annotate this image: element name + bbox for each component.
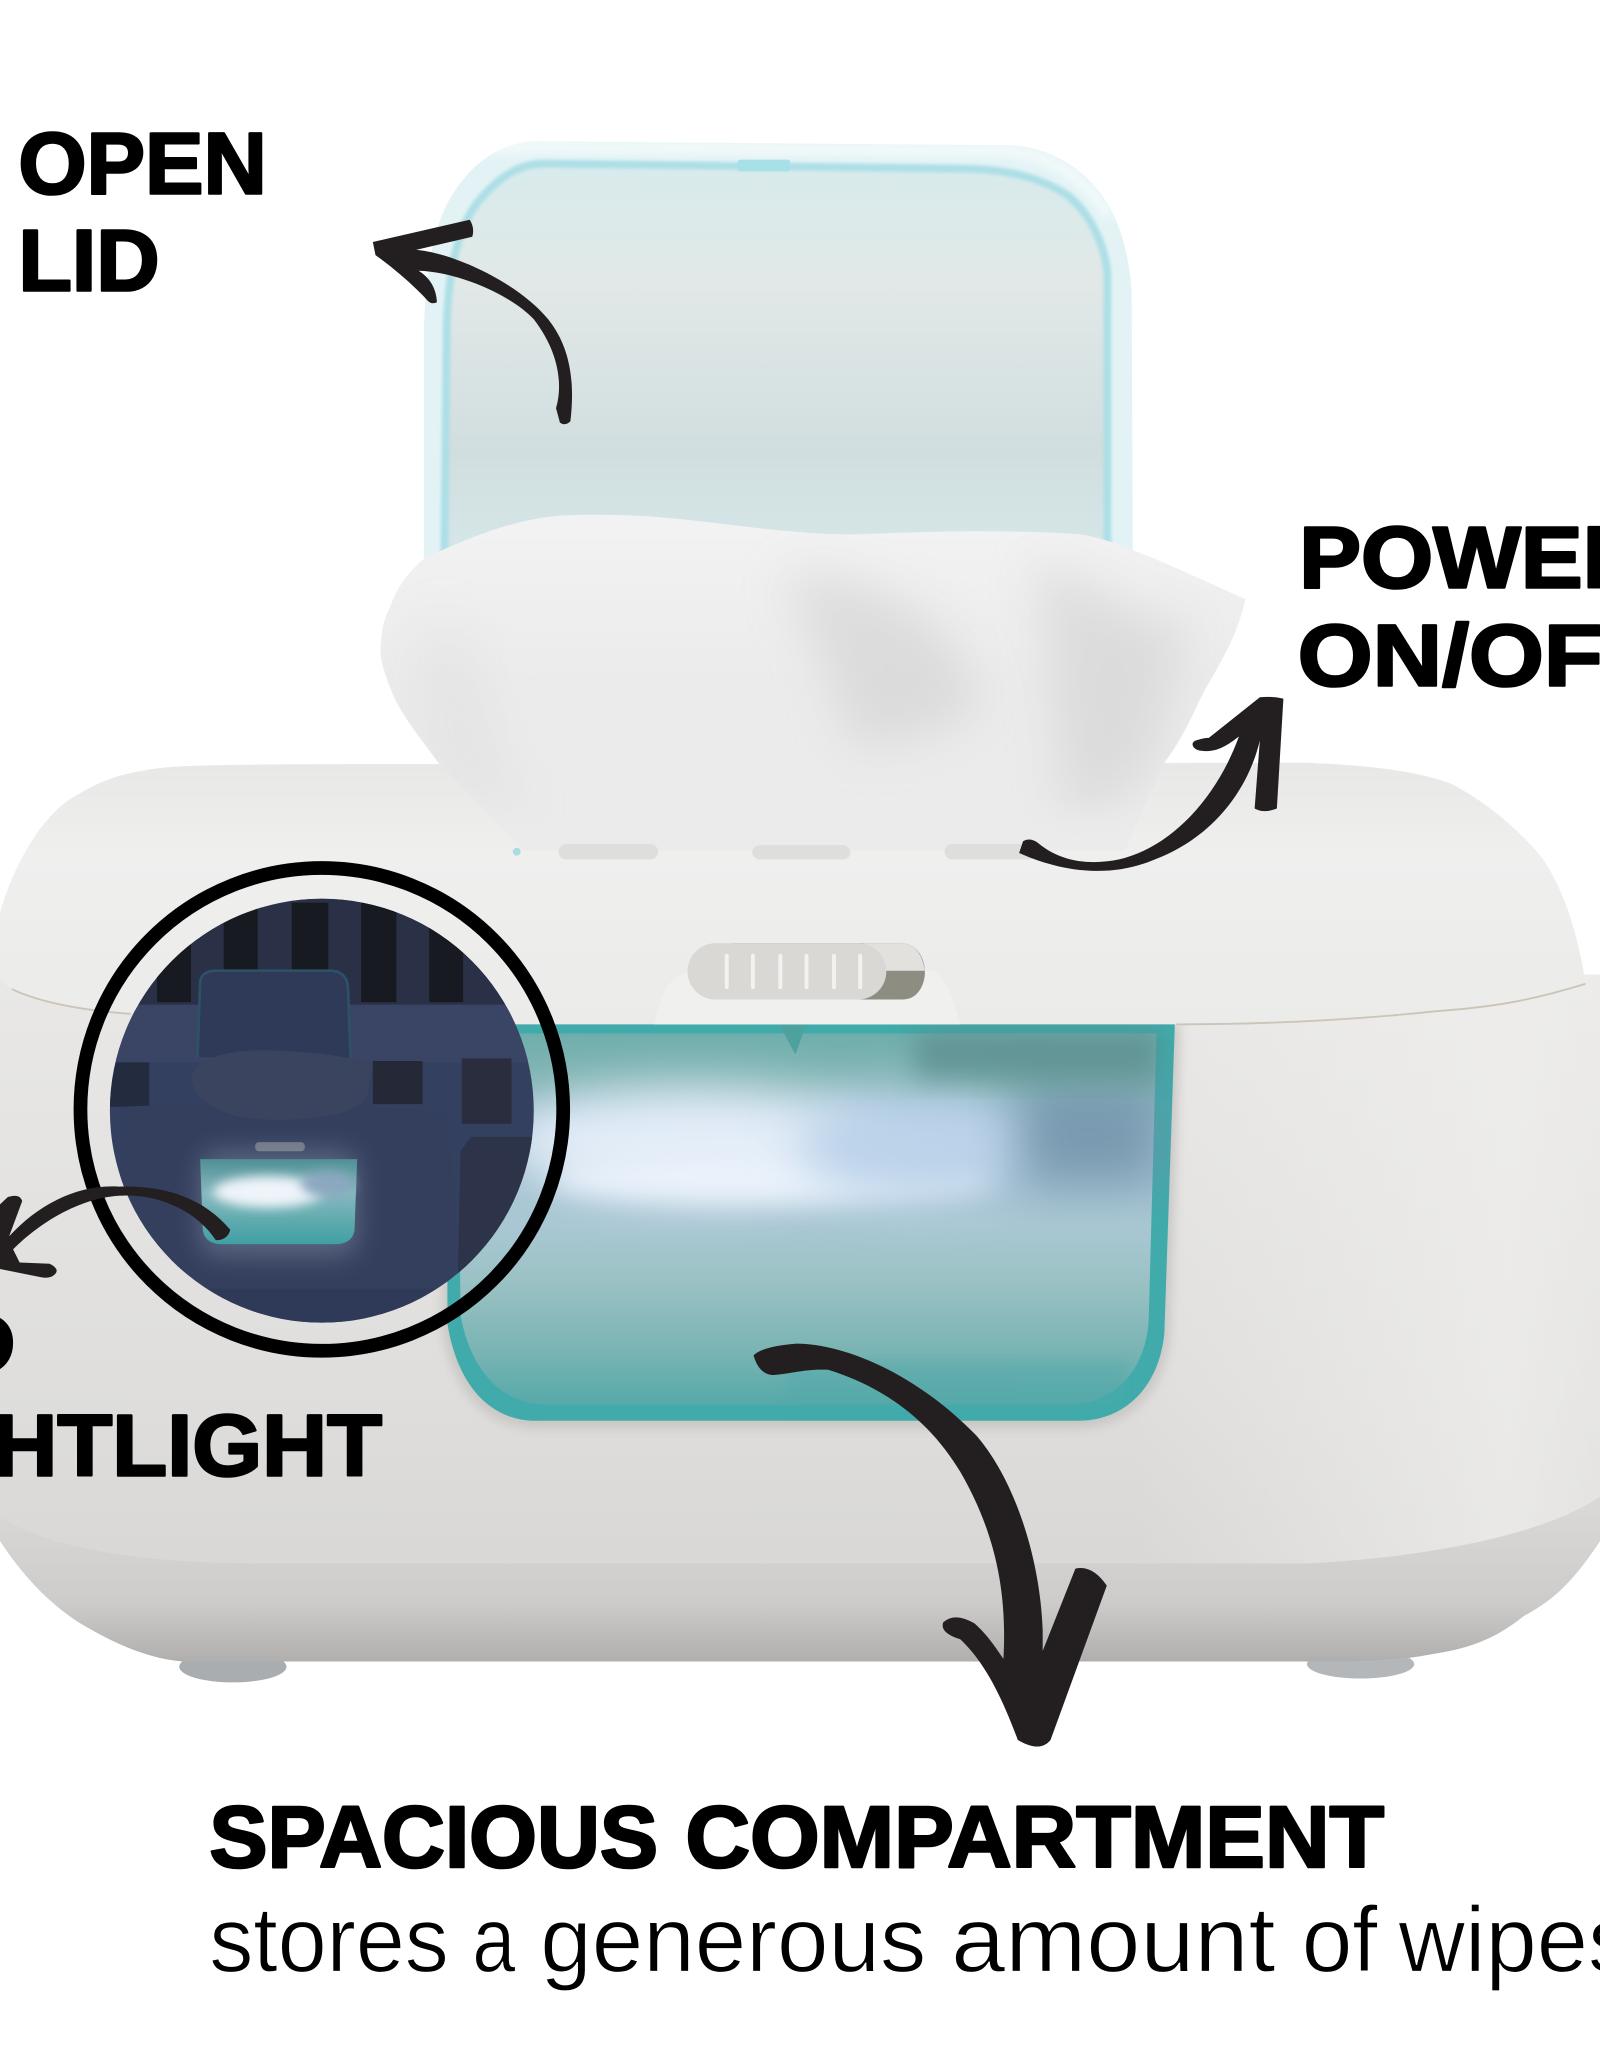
arrow: nightlight: [0, 1186, 230, 1278]
description text: [209, 1888, 1600, 1992]
description text: of: [1302, 1888, 1378, 1992]
label: power on/off: [1298, 508, 1600, 705]
lower body: [0, 975, 1600, 1661]
inset pillow: [458, 1137, 536, 1276]
description text: amount: [951, 1888, 1276, 1992]
arrow: spacious compartment: [754, 1344, 1107, 1747]
window shadow: [442, 1024, 1180, 1429]
top lid of body: [0, 763, 1586, 1024]
inset photo: [110, 898, 534, 1323]
lid seams: [12, 984, 1586, 1024]
window glow: [497, 1088, 890, 1193]
label: spacious compartment: [209, 1788, 1384, 1886]
right dim area: [1020, 1086, 1159, 1184]
arrow: power on/off: [1019, 697, 1283, 871]
label: spacious compartment: COMPARTMENT: [686, 1788, 1384, 1886]
label: open lid: OPEN: [18, 115, 267, 213]
product: wipes warmer: [0, 141, 1600, 1682]
viewing window: [447, 1024, 1175, 1421]
base rim: [0, 1491, 1600, 1661]
label: open lid: LID: [18, 211, 160, 309]
nightlight inset circle: [80, 868, 563, 1351]
open lid: [424, 141, 1133, 576]
label: spacious compartment: SPACIOUS: [209, 1788, 658, 1886]
description text: generous: [540, 1888, 926, 1992]
slider latch: [687, 943, 925, 1000]
rubber feet: [179, 1650, 1414, 1682]
description text: stores: [209, 1888, 449, 1992]
description text: a: [472, 1888, 516, 1992]
control buttons: [513, 844, 1036, 860]
label: open lid: [18, 115, 267, 309]
wipe fold shadows: [797, 576, 969, 741]
latch tray: [654, 971, 960, 1024]
wet wipe: [380, 514, 1246, 806]
mini product: [120, 1104, 456, 1297]
arrow: open lid: [373, 220, 572, 424]
inset ring: [80, 868, 563, 1351]
